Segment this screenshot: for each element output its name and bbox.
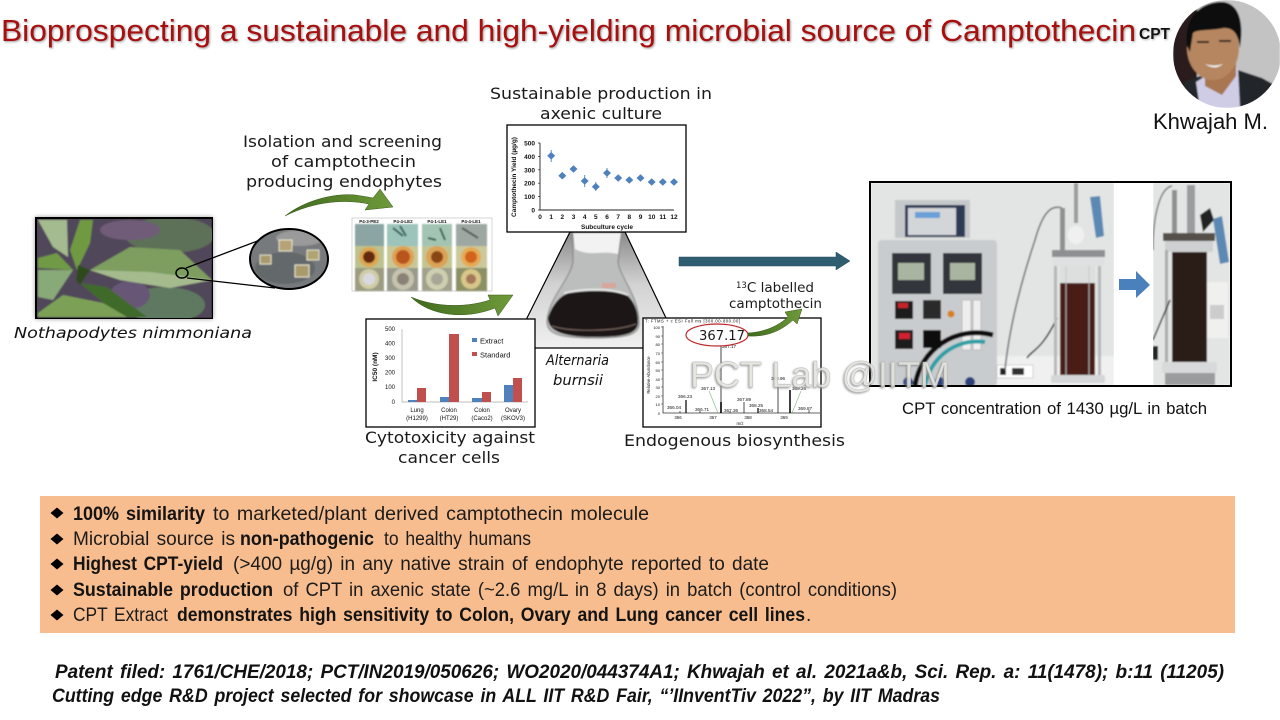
bar chart: cytotoxicity IC50: 200: [385, 370, 396, 376]
petri dish with fungal plugs: [250, 229, 328, 289]
mass spectrum chart: 90: [656, 334, 661, 339]
scatter chart: camptothecin yield per subculture: [507, 125, 686, 232]
heading: sustainable production: [490, 84, 712, 123]
plant photo: [36, 217, 215, 323]
fungus species name: burnsii: [553, 373, 603, 389]
heading: isolation and screening: producing endophytes: [246, 172, 442, 191]
title: Bioprospecting a sustainable and high-yielding microbial source of Camptothecin: [1, 13, 1136, 48]
mass spectrum chart: 367.17: [722, 344, 736, 349]
bar chart: cytotoxicity IC50: 400: [385, 342, 396, 348]
scatter chart: camptothecin yield per subculture: 500: [524, 140, 535, 148]
arrow: peak to label: [748, 309, 802, 336]
mass spectrum chart: 60: [656, 360, 661, 365]
scatter chart: camptothecin yield per subculture: 3: [572, 214, 576, 221]
heading: cytotoxicity: Cytotoxicity against: [365, 428, 535, 447]
bar chart: cytotoxicity IC50: 300: [385, 356, 396, 362]
bar chart: cytotoxicity IC50: 0: [392, 400, 396, 406]
mass spectrum chart: 40: [656, 377, 661, 382]
mass spectrum chart: 20: [656, 394, 661, 399]
heading: endogenous biosynthesis: Endogenous biosynthesis: [624, 431, 845, 450]
mass spectrum chart: 0: [658, 411, 661, 416]
blue arrow between photos: [1119, 271, 1150, 298]
mass spectrum chart: 367: [709, 415, 717, 420]
bar chart: cytotoxicity IC50: (H1299): [406, 416, 428, 422]
scatter chart: camptothecin yield per subculture: 11: [659, 214, 667, 221]
screening image grid: P4-4-LE2: [393, 219, 413, 224]
scatter chart: camptothecin yield per subculture: 5: [594, 214, 598, 221]
panel: key findings: [40, 496, 1235, 633]
mass spectrum chart: 369.26: [792, 386, 806, 391]
bar chart: cytotoxicity IC50: Standard: [480, 350, 510, 360]
bar chart: cytotoxicity IC50: Extract: [480, 336, 504, 346]
mass spectrum chart: Relative Abundance: [646, 356, 651, 394]
batch concentration caption: CPT concentration of 1430 µg/L in batch: [902, 400, 1207, 418]
scatter chart: camptothecin yield per subculture: Subculture cycle: [581, 224, 633, 231]
scatter chart: camptothecin yield per subculture: 100: [524, 194, 535, 201]
screening image grid: P4-4-LE1: [461, 219, 481, 224]
portrait of Khwajah M.: [1173, 0, 1280, 108]
heading: sustainable production: axenic culture: [540, 104, 662, 123]
scatter chart: camptothecin yield per subculture: 4: [583, 214, 587, 221]
bullet 2: to healthy humans: [384, 529, 531, 550]
scatter chart: camptothecin yield per subculture: 300: [524, 167, 535, 174]
mass spectrum chart: 70: [656, 351, 661, 356]
bar chart: cytotoxicity IC50: IC50 (nM): [372, 352, 379, 382]
portrait name: Khwajah M.: [1153, 109, 1268, 134]
heading: isolation and screening: Isolation and screening: [243, 132, 442, 151]
mass spectrum chart: 367.13: [701, 386, 715, 391]
patent and publication note: Cutting edge R&D project selected for showcase in ALL IIT R&D Fair, “’IInventTiv 2022”, by IIT Madras: [52, 686, 940, 707]
mass spectrum chart: 100: [653, 325, 661, 330]
scatter chart: camptothecin yield per subculture: 6: [605, 214, 609, 221]
label: 13C labelled camptothecin: 13: [736, 281, 747, 291]
magnification lines: [186, 240, 275, 288]
screening image grid: P4-3-PE2: [359, 219, 379, 224]
heading: sustainable production: Sustainable production in: [490, 84, 712, 103]
heading: cytotoxicity: [365, 428, 535, 467]
scatter chart: camptothecin yield per subculture: 12: [670, 214, 678, 221]
mass spectrum chart: T: FTMS + c ESI Full ms [300.00-800.00]: [645, 318, 740, 324]
patent and publication note: [52, 662, 1224, 707]
bioreactor photo panel: [870, 182, 1231, 387]
mass spectrum chart: 369.87: [798, 406, 812, 411]
mass spectrum chart: 30: [656, 385, 661, 390]
bar chart: cytotoxicity IC50: (Caco2): [471, 416, 493, 422]
patent and publication note: Patent filed: 1761/CHE/2018; PCT/IN2019/050626; WO2020/044374A1; Khwajah et al. 2021a&b, Sci. Rep. a: 11(1478); b:11 (11205): [55, 662, 1224, 683]
scatter chart: camptothecin yield per subculture: 400: [524, 154, 535, 161]
scatter chart: camptothecin yield per subculture: 9: [639, 214, 643, 221]
mass spectrum chart: 367.36: [724, 408, 738, 413]
fungus species name: Alternaria: [545, 353, 609, 369]
fungus species name: [545, 353, 609, 389]
scatter chart: camptothecin yield per subculture: 7: [616, 214, 620, 221]
bullet 2: non-pathogenic: [240, 529, 374, 550]
mass spectrum chart: 50: [656, 368, 661, 373]
bullet 1: to marketed/plant derived camptothecin molecule: [213, 504, 649, 525]
mass spectrum chart: 367.17: [699, 328, 745, 344]
label: 13C labelled camptothecin: camptothecin: [729, 296, 822, 312]
bullet 3: Highest CPT-yield: [73, 554, 223, 575]
scatter chart: camptothecin yield per subculture: Camptothecin Yield (µg/g): [511, 137, 518, 217]
screening image grid: P4-1-LE1: [427, 219, 447, 224]
mass spectrum chart: 368.25: [749, 403, 763, 408]
bullet 5: .: [806, 605, 811, 626]
mass spectrum chart: 369: [780, 415, 788, 420]
mass spectrum chart: 10: [656, 402, 661, 407]
arrow: plant to screening: [285, 189, 393, 216]
bullet 2: [50, 529, 531, 550]
mass spectrum chart: 368.54: [759, 408, 773, 413]
arrow: scale-up: [679, 252, 850, 270]
scatter chart: camptothecin yield per subculture: 200: [524, 181, 535, 188]
scatter chart: camptothecin yield per subculture: 10: [648, 214, 656, 221]
scatter chart: camptothecin yield per subculture: 0: [538, 214, 542, 221]
screening image grid: [352, 218, 492, 291]
label: 13C labelled camptothecin: [729, 280, 822, 312]
bullet 4: of CPT in axenic state (~2.6 mg/L in 8 days) in batch (control conditions): [283, 580, 897, 601]
watermark: PCT Lab @IITM: [690, 354, 950, 395]
mass spectrum chart: 366: [674, 415, 682, 420]
mass spectrum chart: 366.23: [678, 394, 692, 399]
bar chart: cytotoxicity IC50: Colon: [474, 408, 490, 414]
bullet 4: Sustainable production: [73, 580, 273, 601]
bar chart: cytotoxicity IC50: Lung: [410, 408, 424, 414]
scatter chart: camptothecin yield per subculture: 2: [560, 214, 564, 221]
mass spectrum chart: 368: [744, 415, 752, 420]
bullet 2: Microbial source is: [73, 529, 235, 550]
arrow: screening to flask: [411, 295, 513, 316]
scatter chart: camptothecin yield per subculture: 0: [531, 208, 535, 214]
mass spectrum chart: m/z: [736, 421, 744, 426]
bullet 5: CPT Extract: [73, 605, 169, 626]
mass spectrum chart: 80: [656, 342, 661, 347]
flask photo: [527, 232, 666, 348]
bar chart: cytotoxicity IC50: Colon: [441, 408, 457, 414]
scatter chart: camptothecin yield per subculture: 8: [627, 214, 631, 221]
label: 13C labelled camptothecin: C labelled: [747, 280, 814, 296]
bar chart: cytotoxicity IC50: (HT29): [440, 416, 458, 422]
bullet 3: (>400 µg/g) in any native strain of endophyte reported to date: [233, 554, 769, 575]
heading: cytotoxicity: cancer cells: [398, 448, 500, 467]
mass spectrum chart: 366.04: [667, 405, 681, 410]
bar chart: cytotoxicity IC50: Ovary: [505, 408, 521, 414]
CPT abbreviation: CPT: [1139, 26, 1170, 43]
bullet 5: demonstrates high sensitivity to Colon, Ovary and Lung cancer cell lines: [177, 605, 805, 626]
bar chart: cytotoxicity IC50: 500: [385, 327, 396, 333]
mass spectrum chart: [643, 318, 821, 427]
left bioreactor photo: [871, 183, 1114, 387]
bar chart: cytotoxicity IC50: (SKOV3): [501, 416, 525, 422]
scatter chart: camptothecin yield per subculture: 1: [549, 214, 553, 221]
heading: isolation and screening: of camptothecin: [271, 152, 416, 171]
bar chart: cytotoxicity IC50: 100: [385, 385, 396, 391]
right bioreactor photo: [1153, 183, 1230, 385]
magnified spot on leaf: [176, 268, 188, 278]
mass spectrum chart: 368.96: [771, 376, 785, 381]
plant species name: Nothapodytes nimmoniana: [14, 324, 252, 342]
bullet 1: 100% similarity: [73, 504, 205, 525]
heading: isolation and screening: [243, 132, 442, 191]
mass spectrum chart: 366.71: [695, 407, 709, 412]
bar chart: cytotoxicity IC50: [366, 319, 535, 427]
mass spectrum chart: 367.89: [737, 397, 751, 402]
